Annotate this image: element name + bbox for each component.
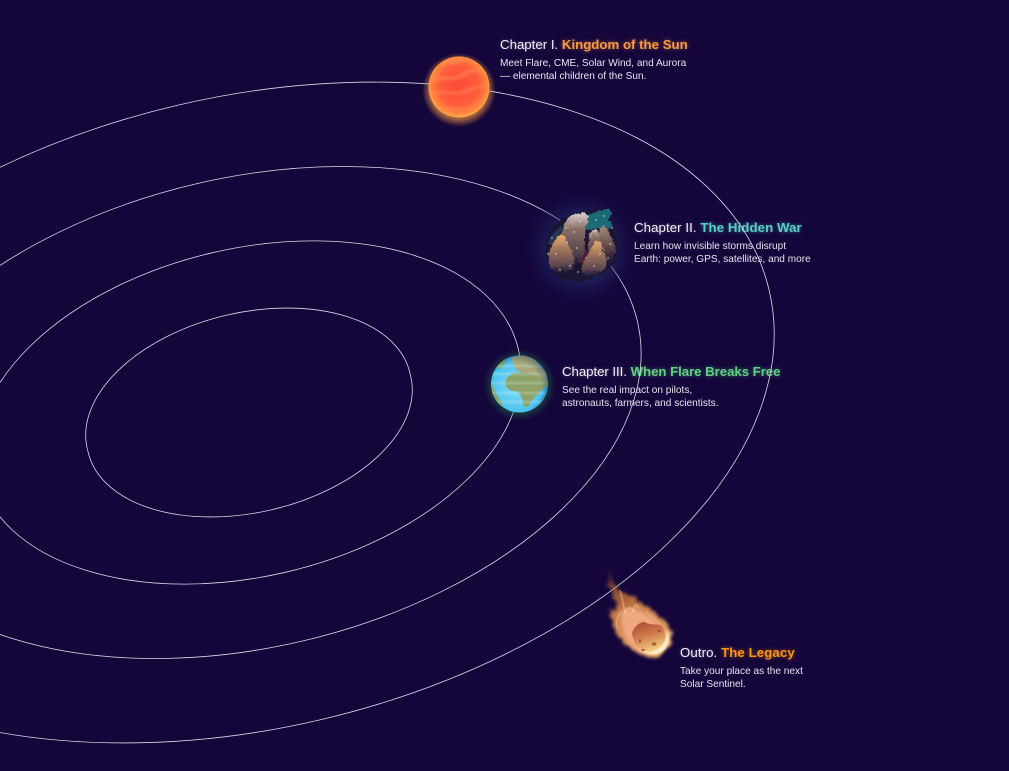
description: chapter II — [634, 240, 811, 264]
description: chapter I: — elemental children of the Sun. — [500, 70, 646, 82]
icon: sun planet — [422, 53, 496, 127]
heading: chapter I: Chapter I. Kingdom of the Sun — [500, 37, 688, 52]
description: chapter III: See the real impact on pilots, — [562, 384, 692, 396]
description: chapter II: Earth: power, GPS, satellites, and more — [634, 254, 811, 264]
description: outro — [680, 666, 803, 690]
orbit and planet artwork — [0, 54, 775, 744]
heading: chapter III: Chapter III. When Flare Breaks Free — [562, 364, 780, 379]
description: chapter III — [562, 384, 719, 408]
icon: nebula — [523, 190, 639, 306]
description: chapter I: Meet Flare, CME, Solar Wind, and Aurora — [500, 58, 686, 68]
description: chapter I — [500, 58, 686, 82]
icon: comet — [607, 566, 671, 657]
orbit rings — [0, 82, 774, 743]
description: outro: Take your place as the next — [680, 666, 803, 676]
icon: earth — [484, 349, 556, 421]
chapter III text — [562, 364, 782, 408]
heading: chapter II: Chapter II. The Hidden War — [634, 220, 802, 235]
description: chapter III: astronauts, farmers, and scientists. — [562, 398, 719, 408]
description: outro: Solar Sentinel. — [680, 678, 746, 690]
chapter I text — [500, 37, 690, 82]
outro text — [679, 645, 803, 690]
chapter II text — [634, 220, 811, 264]
description: chapter II: Learn how invisible storms disrupt — [634, 240, 786, 252]
heading: outro: Outro. The Legacy — [680, 645, 795, 660]
